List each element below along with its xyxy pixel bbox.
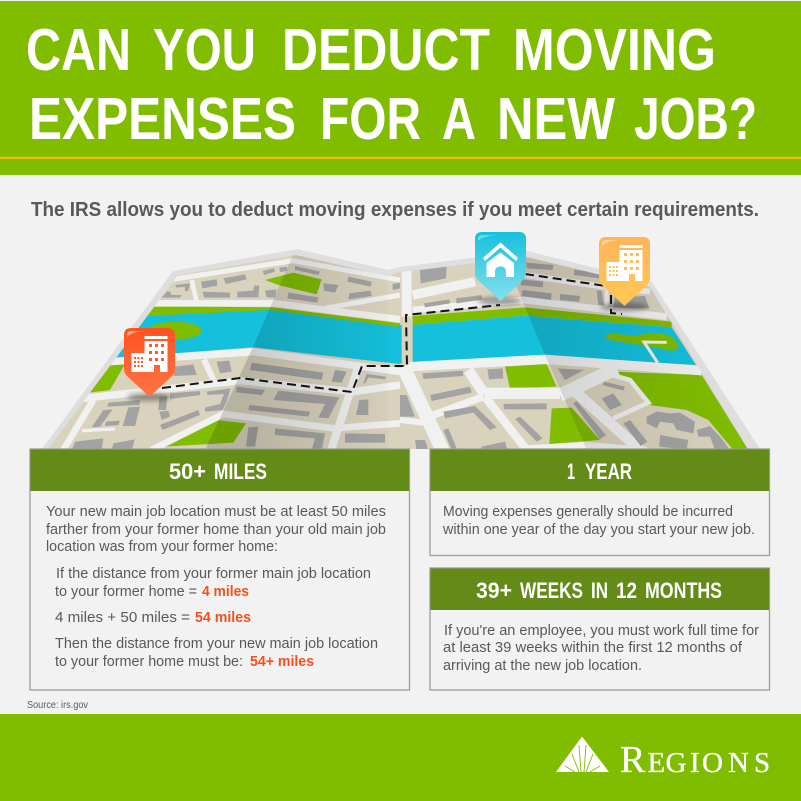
panel: 50+ miles: Then the distance from your new main job location — [55, 636, 378, 652]
panel: 50+ miles: 4 miles + 50 miles = — [55, 610, 190, 626]
title banner: EXPENSES — [29, 86, 296, 152]
panel: 39+ weeks in 12 months: IN — [591, 578, 608, 603]
title banner: MOVING — [513, 17, 716, 83]
panel: 39+ weeks in 12 months: arriving at the new job location. — [443, 658, 642, 674]
title banner — [0, 1, 801, 175]
title banner: DEDUCT — [282, 17, 490, 83]
title banner: FOR — [320, 86, 421, 152]
icon: blue home pin — [475, 232, 526, 305]
folded street map — [40, 245, 760, 453]
title banner: A — [442, 86, 476, 152]
Regions logo — [556, 736, 770, 781]
panel: 50+ miles: If the distance from your former main job location — [56, 566, 371, 582]
panel: 50+ miles: farther from your former home than your old main job — [46, 522, 386, 538]
panel: 39+ weeks in 12 months: 39+ — [476, 578, 512, 603]
panel: 1 year — [430, 449, 770, 556]
dashed route — [162, 274, 622, 392]
title banner: CAN — [26, 17, 131, 83]
panel: 39+ weeks in 12 months: MONTHS — [645, 578, 722, 603]
icon: orange office pin — [599, 237, 650, 311]
panel: 50+ miles: MILES — [214, 459, 267, 484]
panel: 50+ miles: 4 miles — [202, 584, 249, 600]
panel: 1 year: within one year of the day you start your new job. — [442, 522, 755, 538]
panel: 1 year: Moving expenses generally should be incurred — [443, 504, 733, 520]
panel: 50+ miles: Your new main job location must be at least 50 miles — [46, 504, 386, 520]
panel: 50+ miles: location was from your former home: — [46, 539, 278, 555]
panel: 50+ miles: 54+ miles — [250, 654, 314, 670]
Regions logo: R — [620, 739, 646, 781]
Regions logo: EGIONS — [648, 747, 770, 779]
title banner: YOU — [153, 17, 256, 83]
panel: 39+ weeks in 12 months — [430, 568, 770, 690]
panel: 50+ miles: to your former home = — [55, 584, 197, 600]
panel: 1 year: YEAR — [585, 459, 632, 484]
subtitle: The IRS allows you to deduct moving expenses if you meet certain requirements. — [31, 198, 759, 221]
panel: 39+ weeks in 12 months: 12 — [616, 578, 637, 603]
panel: 1 year: 1 — [567, 459, 575, 484]
panel: 39+ weeks in 12 months: WEEKS — [520, 578, 583, 603]
footer band — [0, 714, 801, 801]
panel: 50+ miles: 50+ — [169, 459, 206, 484]
title banner: NEW — [497, 86, 615, 152]
panel: 50+ miles: 54 miles — [195, 610, 251, 626]
source note: Source: irs.gov — [27, 699, 89, 711]
panel: 39+ weeks in 12 months: If you're an employee, you must work full time for — [444, 623, 759, 639]
icon: red office pin — [124, 328, 175, 401]
panel: 50+ miles — [30, 449, 410, 690]
title banner: JOB? — [634, 86, 757, 152]
panel: 50+ miles: to your former home must be: — [55, 654, 243, 670]
panel: 39+ weeks in 12 months: at least 39 weeks within the first 12 months of — [443, 640, 743, 656]
